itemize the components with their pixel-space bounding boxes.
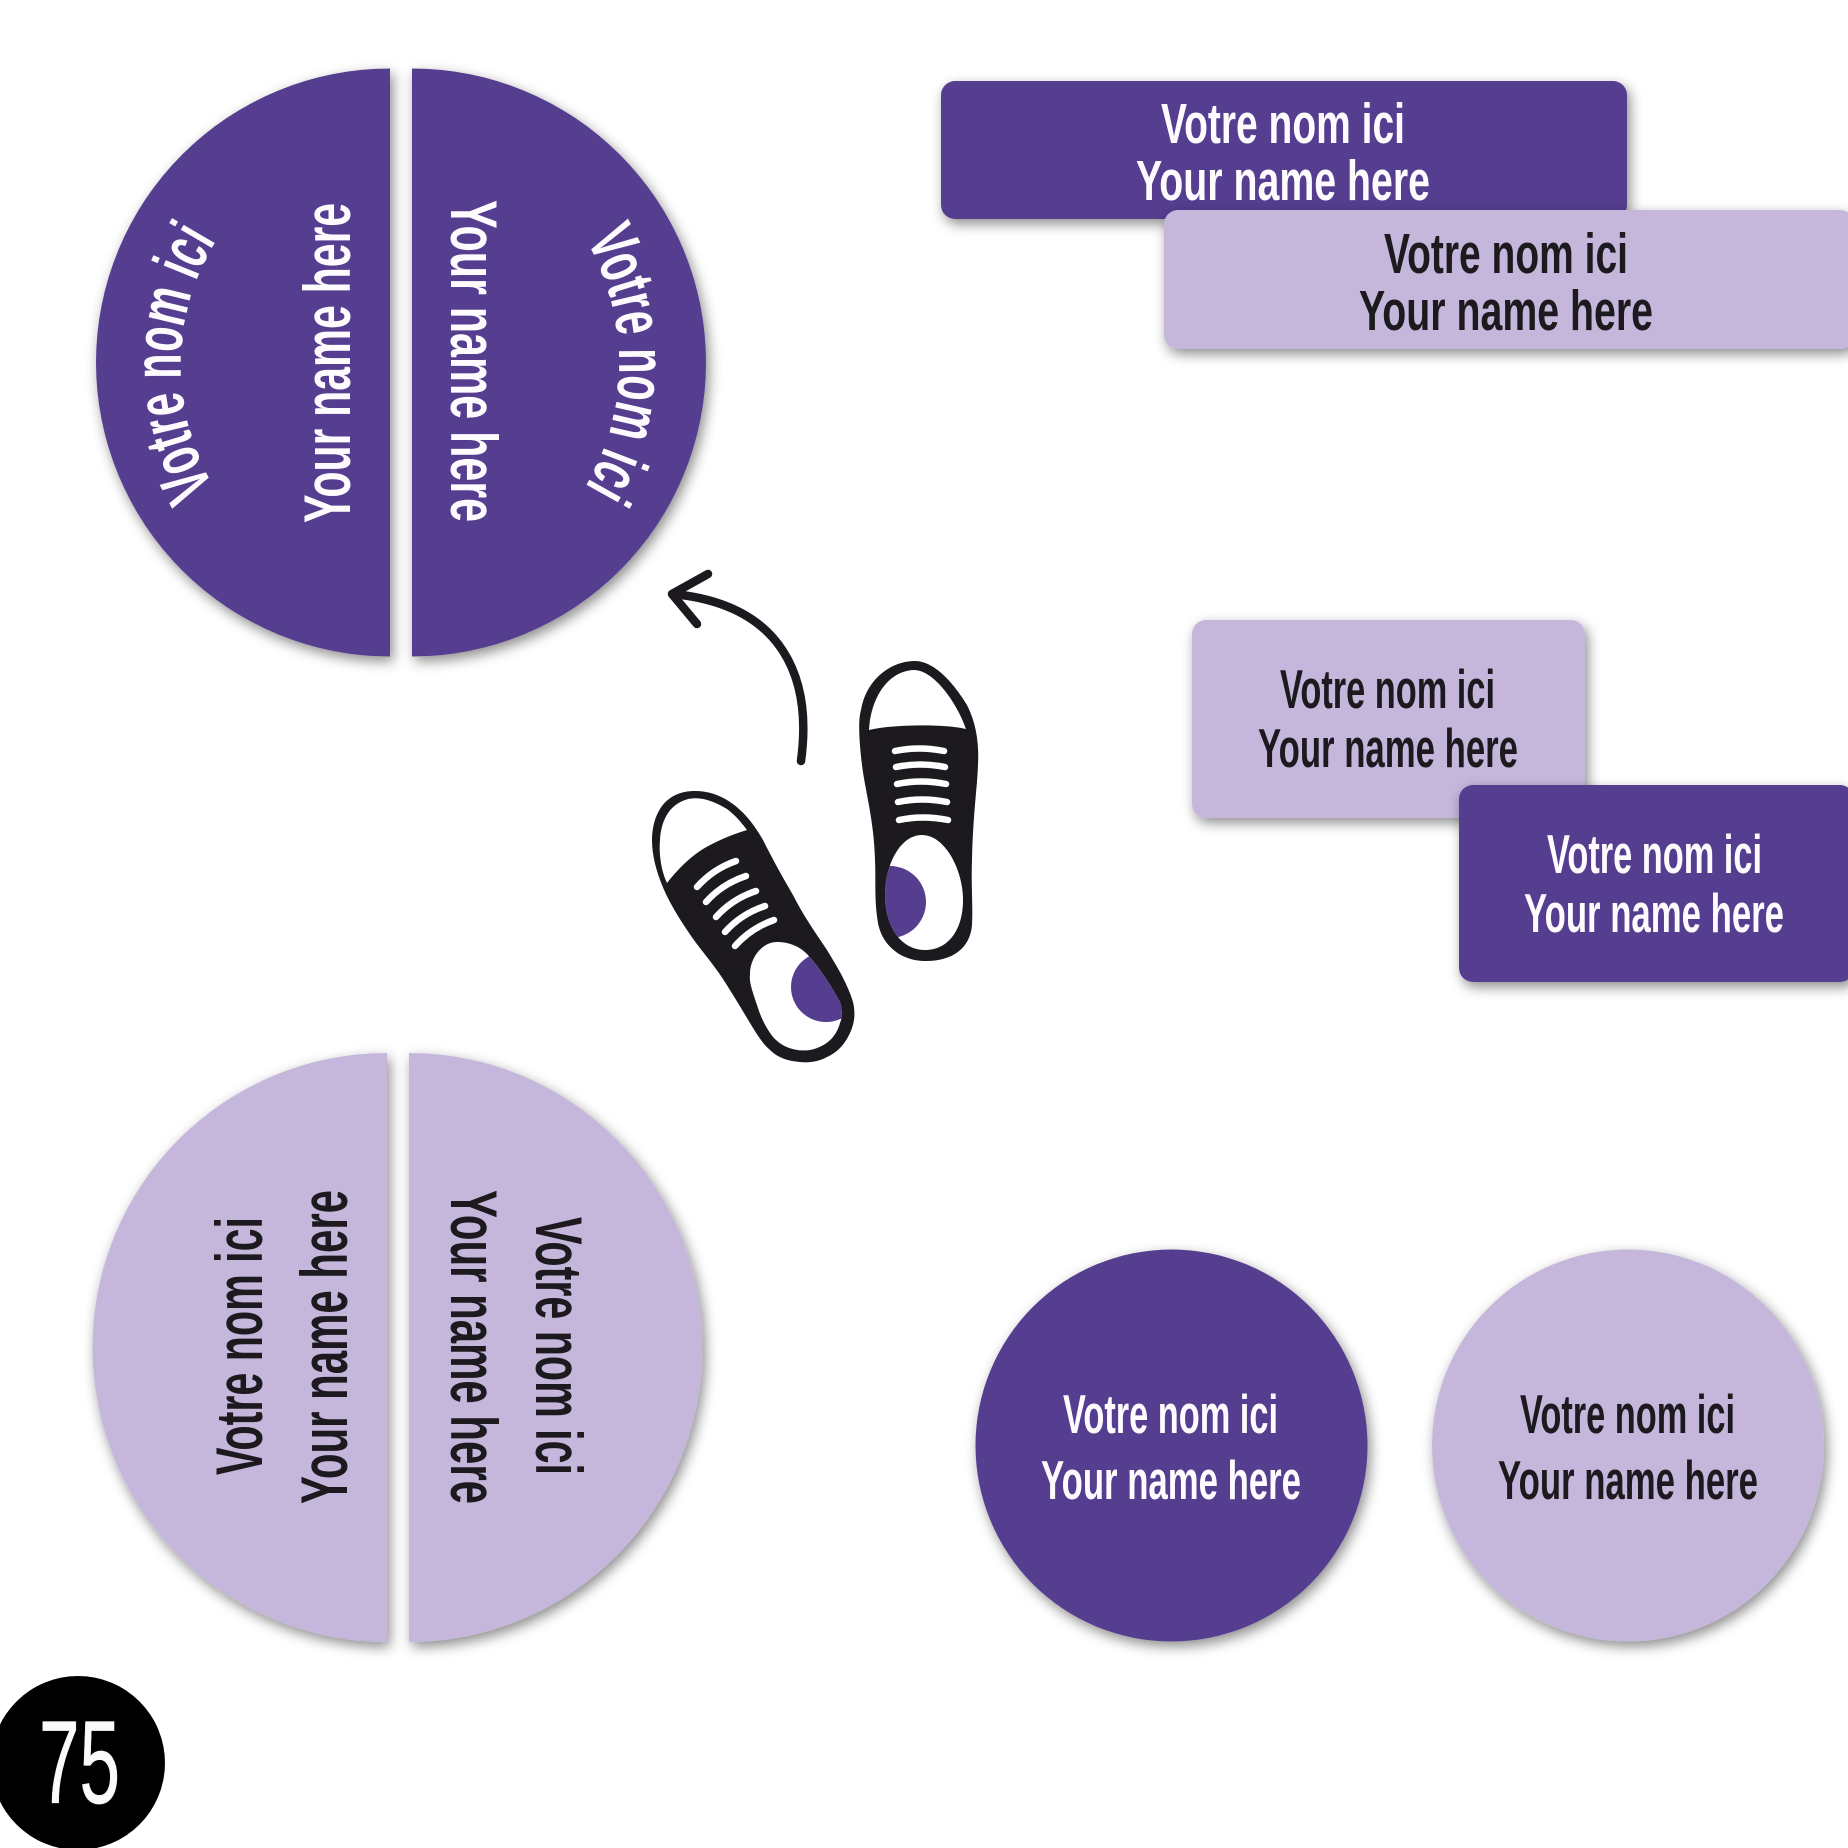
icon: right shoe — [854, 661, 978, 961]
page number badge — [0, 1676, 165, 1848]
right light semicircle — [409, 1053, 702, 1642]
panel: light split circle — [92, 1053, 702, 1642]
left light semicircle: Your name here — [287, 1190, 361, 1504]
right light semicircle: Votre nom ici — [522, 1217, 596, 1475]
icon: curved arrow — [672, 574, 803, 761]
panel: light banner — [1164, 210, 1848, 349]
panel: light round sticker — [1432, 1250, 1824, 1642]
panel: light banner: Votre nom ici — [1384, 222, 1628, 286]
panel: dark banner: Your name here — [1136, 149, 1430, 213]
left dark semicircle: Your name here — [290, 203, 364, 523]
right dark semicircle: Votre nom ici — [586, 218, 656, 509]
left light semicircle — [92, 1053, 387, 1642]
panel: dark split circle — [90, 65, 718, 670]
panel: light label: Your name here — [1258, 717, 1518, 779]
panel: light label: Votre nom ici — [1280, 658, 1495, 720]
panel: light label — [1192, 620, 1585, 818]
right dark semicircle — [406, 65, 718, 670]
panel: dark round sticker — [976, 1250, 1368, 1642]
panel: dark round sticker: Your name here — [1041, 1449, 1301, 1511]
left dark semicircle: Votre nom ici — [144, 218, 215, 509]
left dark semicircle — [90, 65, 402, 670]
right dark semicircle: Your name here — [437, 200, 511, 522]
panel: dark banner: Votre nom ici — [1161, 92, 1405, 156]
left light semicircle: Votre nom ici — [202, 1217, 276, 1475]
panel: dark round sticker: Votre nom ici — [1063, 1383, 1278, 1445]
panel: dark banner — [941, 81, 1627, 219]
panel: dark label — [1459, 785, 1848, 982]
page number badge: 75 — [39, 1697, 120, 1829]
panel: light banner: Your name here — [1359, 279, 1653, 343]
icon: left shoe — [652, 791, 861, 1062]
right light semicircle: Your name here — [437, 1190, 511, 1504]
